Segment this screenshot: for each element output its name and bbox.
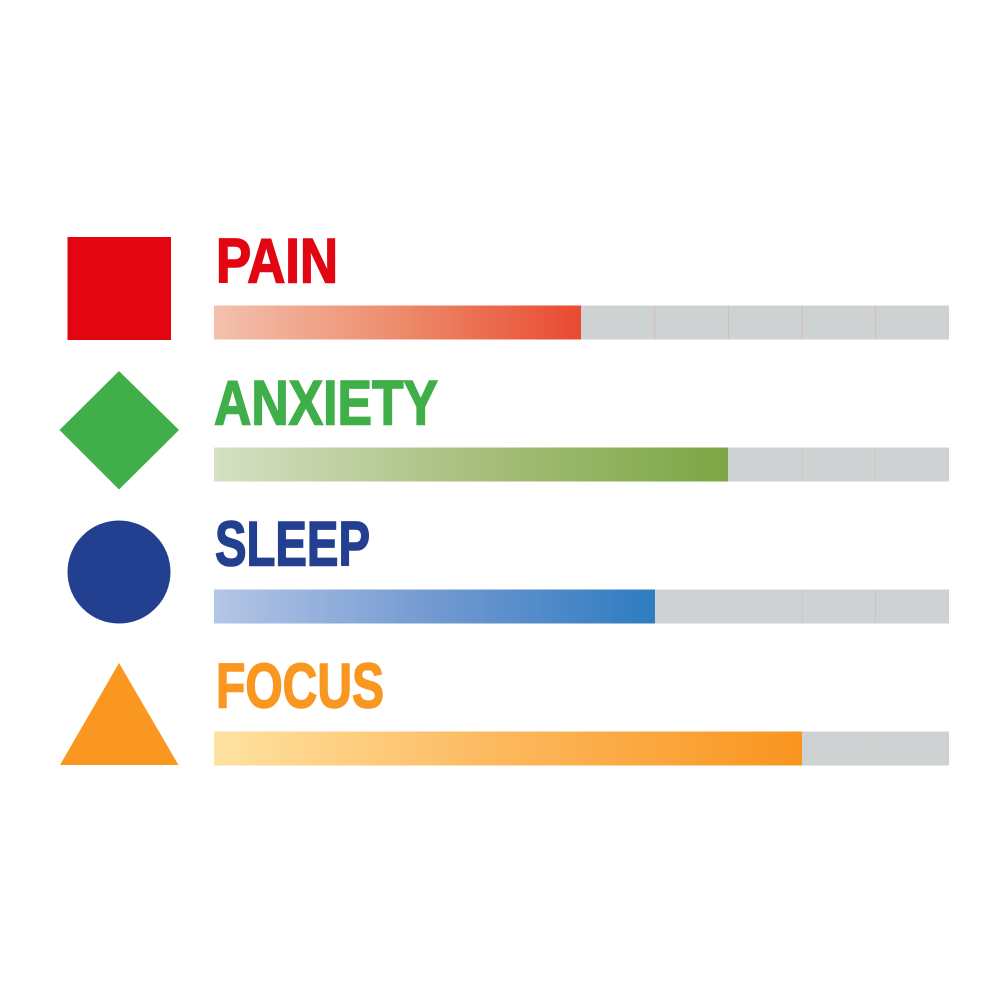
panel: focus	[60, 652, 949, 766]
panel: sleep	[68, 510, 949, 624]
heading: anxiety: ANXIETY	[214, 368, 438, 438]
bar: sleep level	[214, 590, 949, 624]
bar: focus level	[214, 732, 949, 766]
panel: anxiety	[60, 368, 949, 490]
icon: green diamond	[60, 371, 179, 490]
icon: red square	[68, 237, 171, 340]
heading: focus: FOCUS	[216, 652, 384, 722]
icon: orange triangle	[60, 663, 178, 765]
bar: pain level	[214, 306, 949, 340]
panel: pain	[68, 226, 949, 340]
heading: sleep: SLEEP	[215, 510, 370, 580]
icon: blue circle	[68, 520, 170, 624]
heading: pain: PAIN	[216, 226, 338, 296]
bar: anxiety level	[214, 448, 949, 482]
